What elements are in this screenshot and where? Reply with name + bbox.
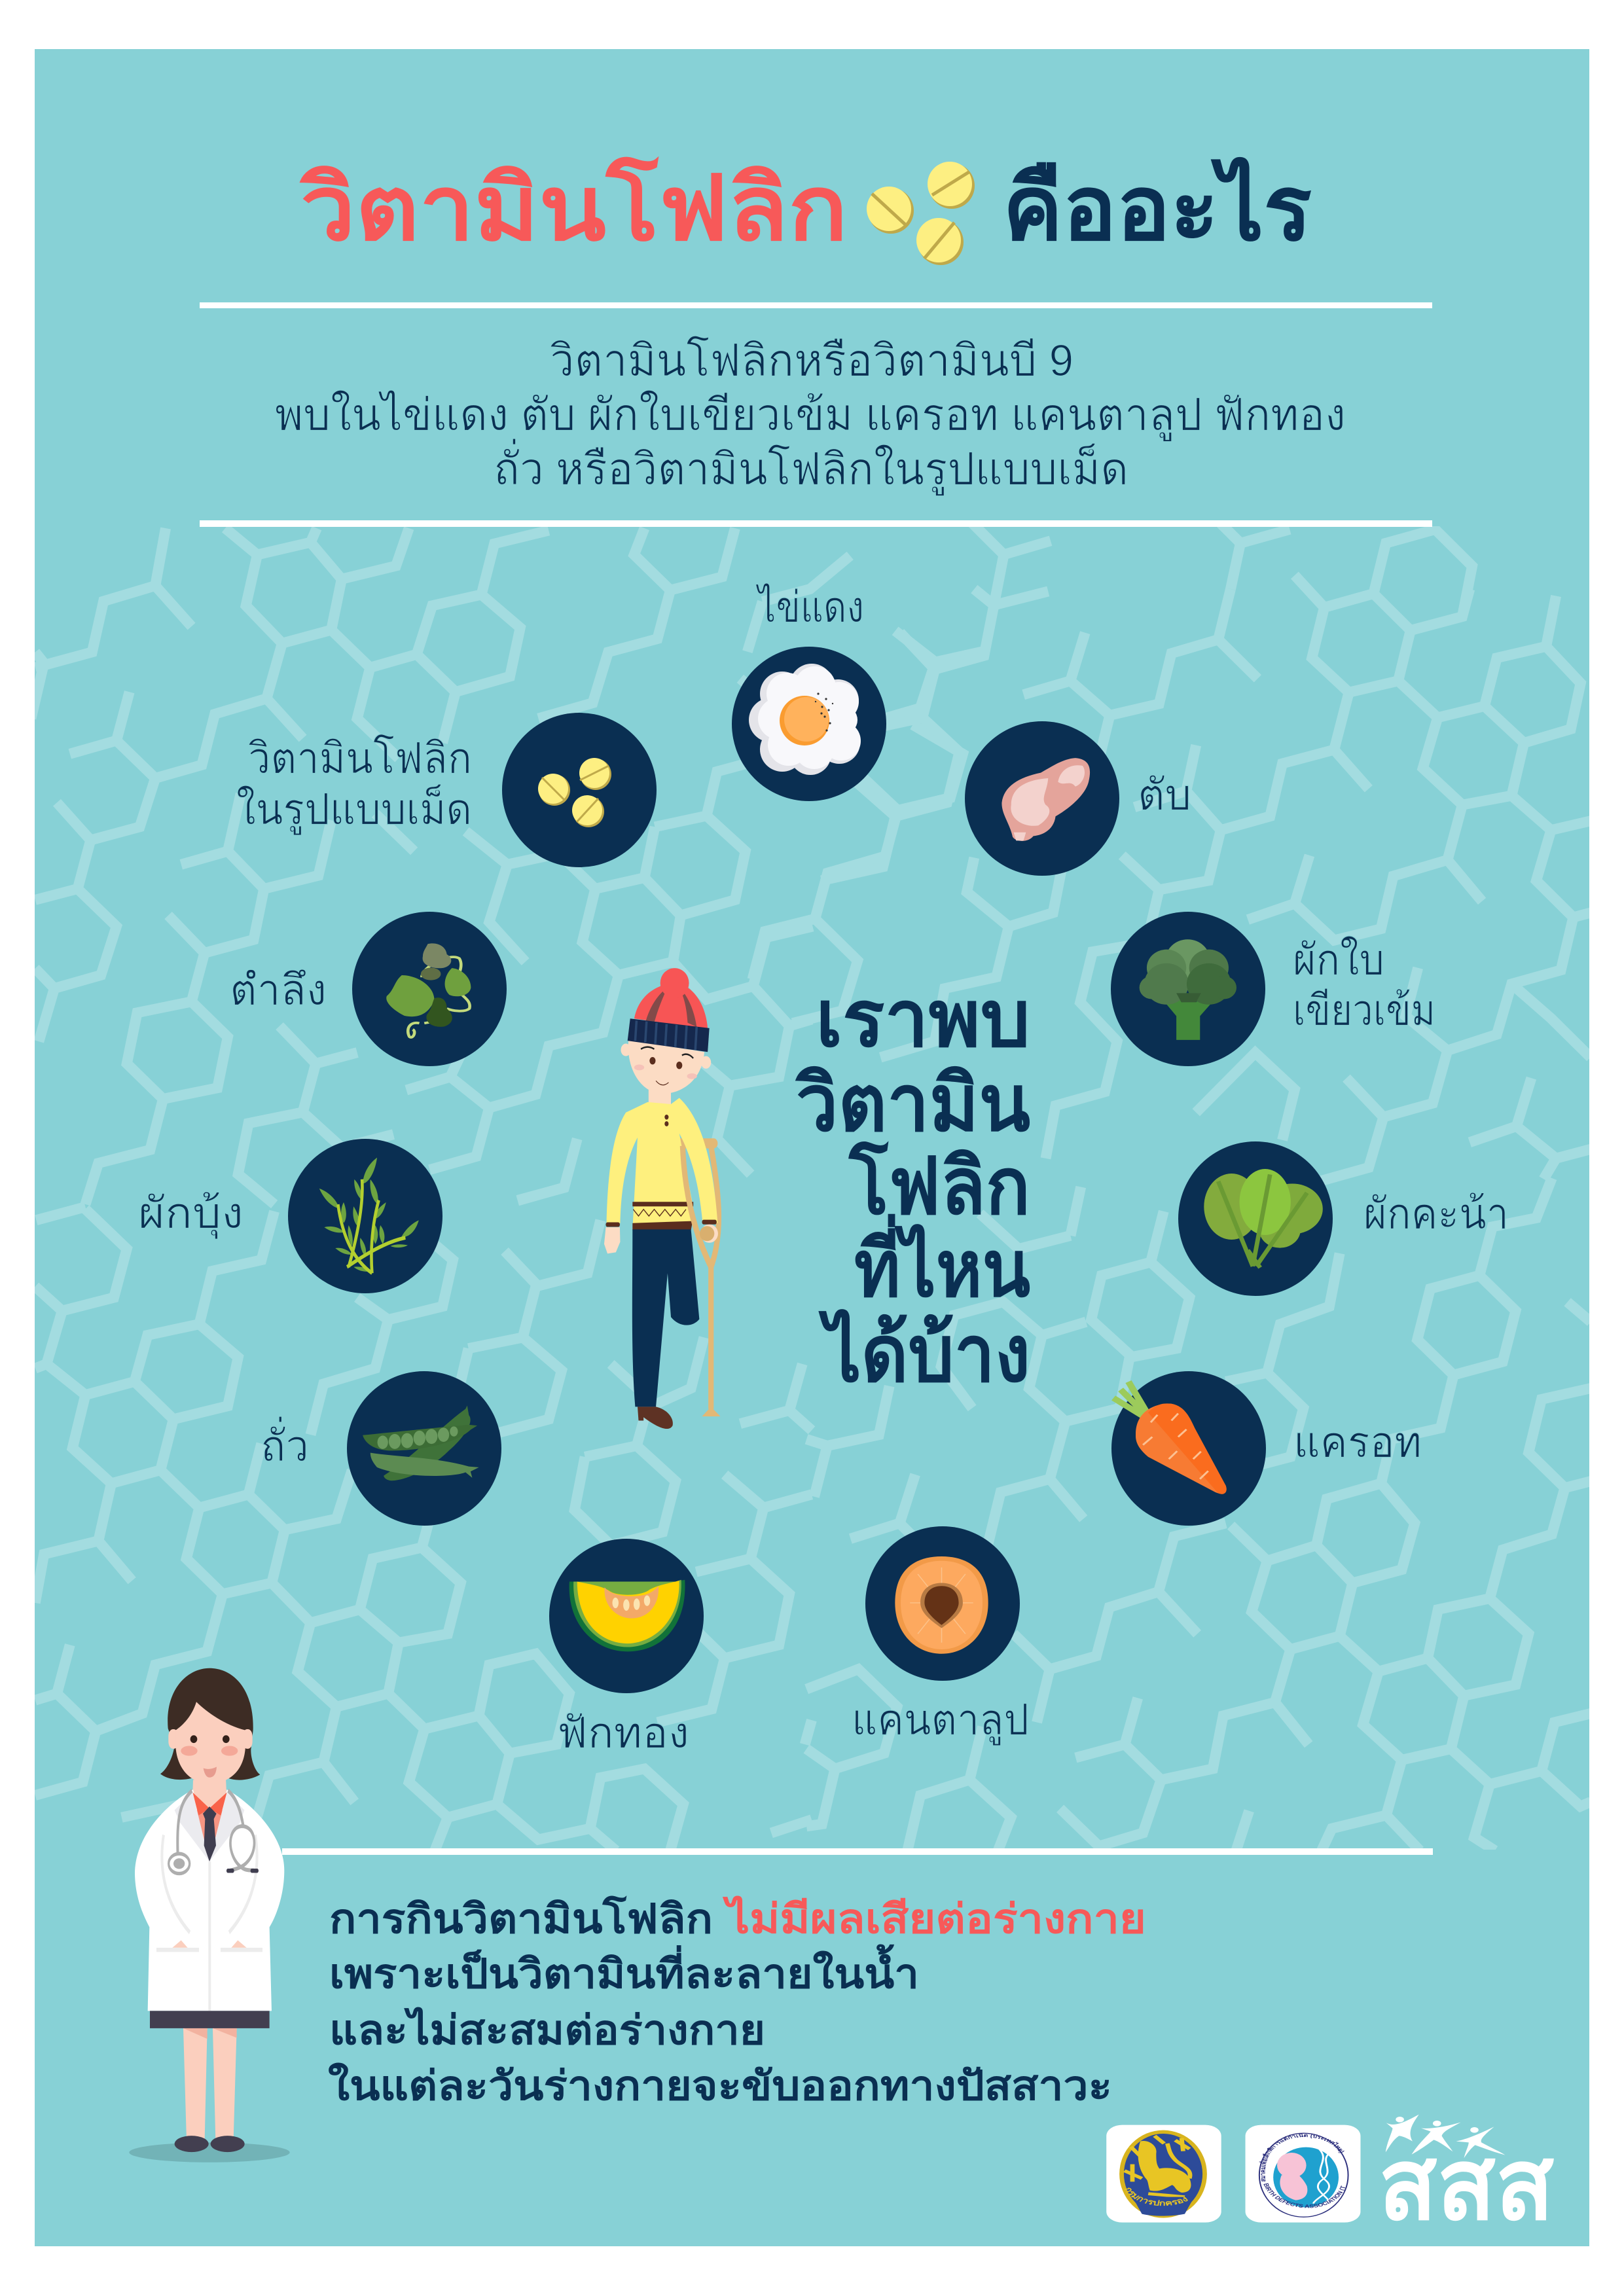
item: pumpkin <box>549 1539 704 1757</box>
hexagon background pattern <box>31 509 1591 1851</box>
item: morning glory <box>138 1139 442 1293</box>
item: pumpkin: ฟักทอง <box>557 1708 689 1757</box>
bottom message text: เพราะเป็นวิตามินที่ละลายในน้ำ <box>329 1944 919 1997</box>
icon: liver <box>1001 758 1090 841</box>
item: beans <box>261 1371 501 1526</box>
item: liver <box>965 721 1191 876</box>
icon: tablets <box>538 758 611 827</box>
central heading: ที่ไหน <box>854 1213 1030 1313</box>
central heading: วิตามิน <box>795 1060 1030 1147</box>
bottom message text: และไม่สะสมต่อร่างกาย <box>329 2007 765 2053</box>
icon: morning glory sprig <box>319 1158 419 1273</box>
item: beans: ถั่ว <box>261 1416 309 1470</box>
icon: three pills in title <box>867 162 975 265</box>
logo: Department of Provincial Administration seal: กรมการปกครอง <box>1125 2187 1188 2206</box>
bottom message text: การกินวิตามินโฟลิก <box>329 1895 713 1942</box>
central heading: เราพบ <box>816 975 1030 1063</box>
icon: cantaloupe half <box>895 1556 988 1654</box>
item: dark green leafy vegetables: เขียวเข้ม <box>1293 986 1435 1034</box>
icon: broccoli <box>1140 939 1236 1040</box>
icon: carrot <box>1113 1382 1227 1494</box>
icon: pumpkin slice <box>569 1580 685 1651</box>
logo: Birth Defects Association seal: BIRTH DEFECTS ASSOCIATION (THAILAND) <box>1263 2183 1346 2208</box>
item: liver: ตับ <box>1138 770 1191 819</box>
item: folic acid tablets <box>236 713 657 867</box>
icon: three jumping figures <box>1386 2115 1505 2158</box>
item: folic acid tablets: ในรูปแบบเม็ด <box>236 783 472 836</box>
divider middle <box>200 520 1432 527</box>
intro text block: ถั่ว หรือวิตามินโฟลิกในรูปแบบเม็ด <box>494 439 1128 496</box>
intro text block: วิตามินโฟลิกหรือวิตามินบี 9 <box>550 335 1074 386</box>
item: egg yolk: ไข่แดง <box>755 583 864 631</box>
bottom message text: ในแต่ละวันร่างกายจะขับออกทางปัสสาวะ <box>328 2062 1112 2109</box>
icon: ivy gourd leaves <box>386 943 471 1037</box>
bottom message text: ไม่มีผลเสียต่อร่างกาย <box>722 1895 1146 1942</box>
icon: pea pods <box>363 1406 479 1480</box>
bottom message text <box>328 1895 1146 2109</box>
ThaiHealth wordmark: สสส <box>1379 2129 1554 2240</box>
item: dark green leafy vegetables <box>1111 912 1435 1066</box>
item: cantaloupe <box>852 1526 1029 1746</box>
illustration: boy with crutch <box>604 968 721 1429</box>
item: ivy gourd: ตำลึง <box>230 965 327 1014</box>
intro text block <box>275 335 1346 496</box>
item: ivy gourd <box>230 912 507 1066</box>
logo: Birth Defects Association seal: สมาคมเพื่อเด็กพิการแต่กำเนิด (ประเทศไทย) <box>1259 2134 1344 2182</box>
item: dark green leafy vegetables: ผักใบ <box>1293 935 1384 984</box>
central heading <box>795 975 1030 1398</box>
item: kale: ผักคะน้า <box>1363 1189 1509 1238</box>
divider top <box>200 302 1432 308</box>
central heading: ได้บ้าง <box>818 1309 1030 1398</box>
title navy text: คืออะไร <box>1003 157 1312 259</box>
item: morning glory: ผักบุ้ง <box>138 1189 244 1240</box>
title <box>299 156 1312 265</box>
item: egg yolk <box>732 583 886 801</box>
item: cantaloupe: แคนตาลูป <box>852 1695 1029 1746</box>
intro text block: พบในไข่แดง ตับ ผักใบเขียวเข้ม แครอท แคนตาลูป ฟักทอง <box>275 389 1346 442</box>
illustration: doctor <box>129 1668 290 2162</box>
logo: ThaiHealth <box>1379 2115 1554 2240</box>
item: kale <box>1178 1141 1509 1296</box>
item: folic acid tablets: วิตามินโฟลิก <box>248 734 472 782</box>
item: carrot: แครอท <box>1293 1418 1422 1466</box>
icon: spinach leaves <box>1204 1169 1323 1268</box>
logo: Department of Provincial Administration seal <box>1106 2125 1221 2223</box>
logo: Birth Defects Association seal <box>1245 2125 1360 2223</box>
central heading: โฟลิก <box>848 1141 1030 1230</box>
item: carrot <box>1111 1371 1422 1526</box>
divider bottom <box>282 1848 1433 1855</box>
title red text: วิตามินโฟลิก <box>299 156 848 259</box>
icon: fried egg <box>749 664 861 775</box>
